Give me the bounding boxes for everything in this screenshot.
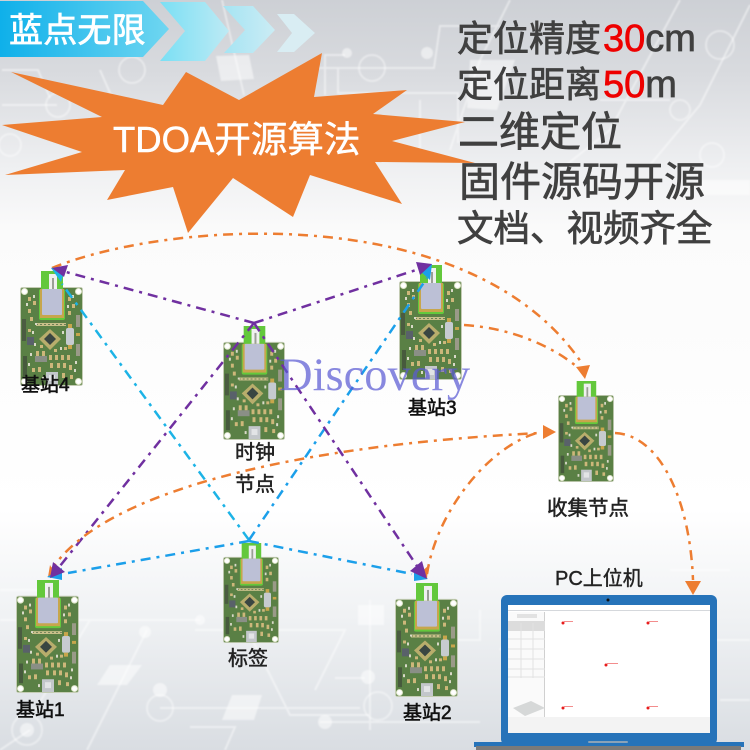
- board: base station 2: [396, 583, 458, 697]
- label: tag: 标签: [228, 647, 268, 670]
- banner: brand with chevrons: [0, 1, 315, 61]
- label: base station 3: 基站3: [408, 397, 457, 419]
- title text: TDOA开源算法: [113, 119, 360, 160]
- arrowheads: [47, 262, 701, 595]
- open source firmware: 固件源码开源: [459, 159, 705, 205]
- laptop with host software: [474, 595, 744, 750]
- board: base station 1: [16, 580, 78, 693]
- board: tag: [223, 543, 279, 643]
- range: 定位距离50m: [457, 64, 677, 106]
- chevron 3: [223, 6, 275, 53]
- brand name: 蓝点无限: [9, 12, 146, 50]
- accuracy: 定位精度30cm: [457, 18, 696, 60]
- arrows: orange data flow: [50, 234, 693, 580]
- board: clock node: [223, 326, 285, 440]
- chevron 4: [277, 14, 315, 52]
- label: base station 1: 基站1: [16, 699, 65, 721]
- board: base station 4: [20, 271, 82, 386]
- board: base station 3: [400, 265, 462, 380]
- chevron 2: [160, 2, 229, 61]
- label: base station 2: 基站2: [403, 702, 452, 724]
- orange starburst title: [2, 53, 475, 233]
- laptop base: [474, 742, 744, 747]
- sidebar table: [508, 612, 545, 717]
- label: node: 节点: [235, 473, 275, 496]
- banner arrow: [0, 1, 169, 57]
- watermark: Discovery: [279, 350, 471, 401]
- label: PC host: PC上位机: [555, 567, 643, 590]
- board: collection node: [558, 381, 614, 482]
- label: collection node: 收集节点: [547, 497, 629, 520]
- arrows: tag to base stations: [62, 278, 427, 574]
- screen: [508, 605, 710, 733]
- documents and videos: 文档、视频齐全: [457, 208, 712, 249]
- label: clock: 时钟: [235, 441, 275, 464]
- label: base station 4: 基站4: [21, 374, 70, 396]
- feature list: [457, 18, 712, 249]
- arrows: clock node to base stations: [60, 270, 417, 566]
- position markers: [562, 621, 658, 710]
- two dimensional: 二维定位: [458, 109, 622, 155]
